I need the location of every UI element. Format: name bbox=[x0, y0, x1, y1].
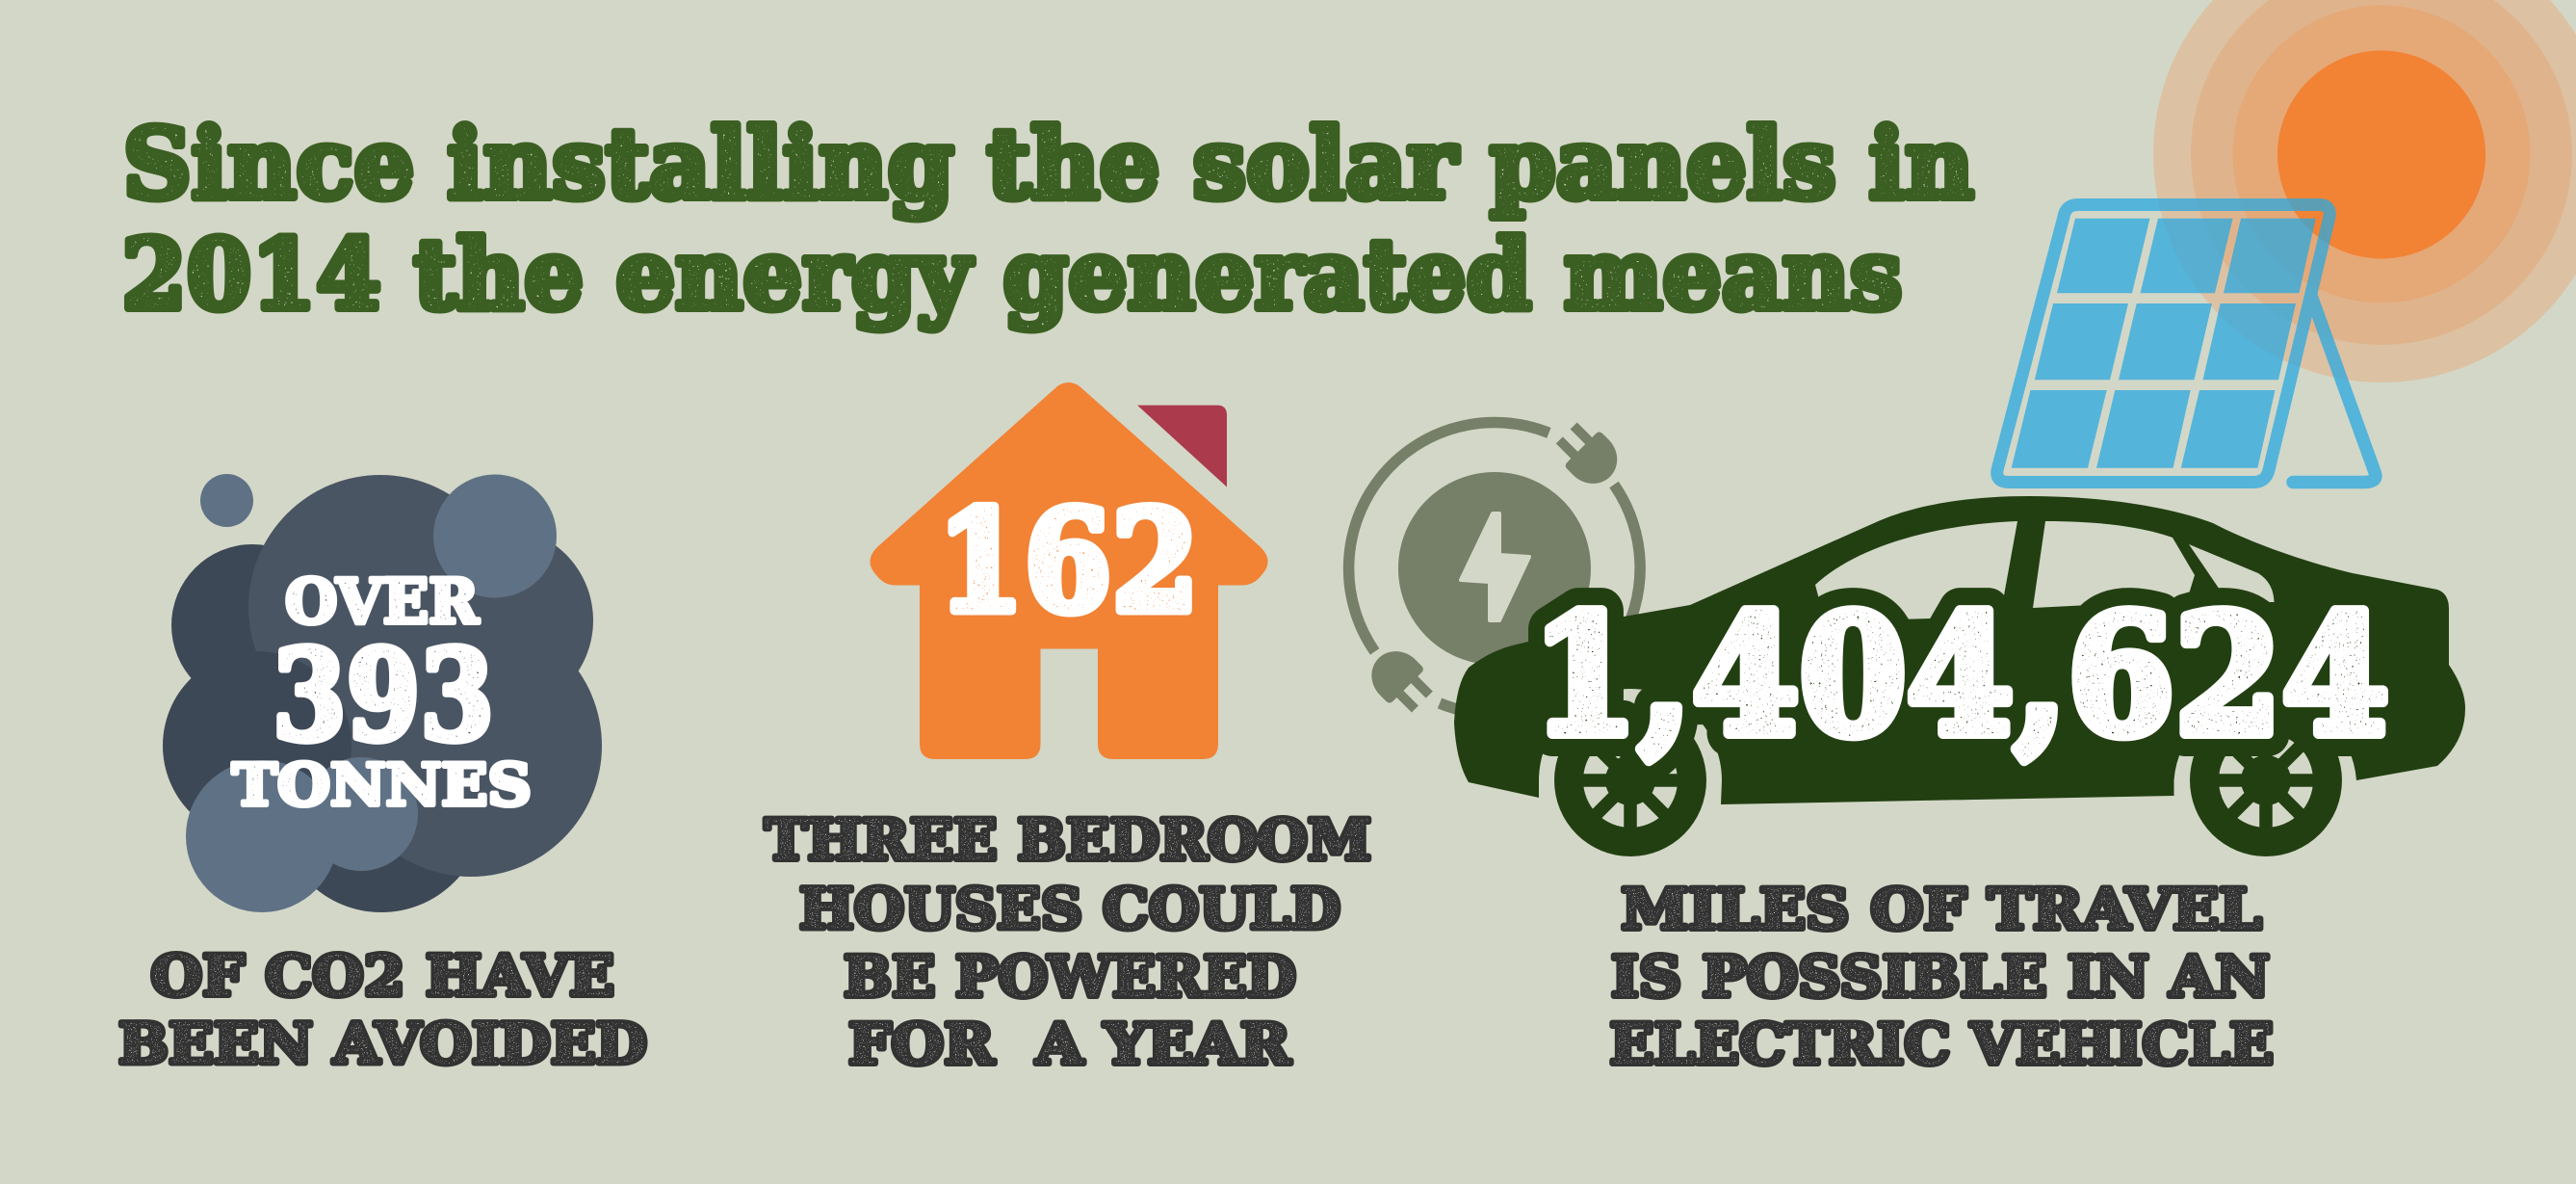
caption: houses powered: HOUSES COULD bbox=[799, 877, 1340, 942]
icon: car bbox=[1454, 496, 2465, 856]
title: Since installing the solar panels in bbox=[123, 107, 1974, 221]
icon: electric charging plug bbox=[1349, 415, 1640, 720]
icon: chimney bbox=[1137, 406, 1227, 487]
icon: solar panel bbox=[1997, 204, 2376, 482]
statistic: over 393 tonnes bbox=[232, 566, 532, 819]
statistic: 1,404,624 miles: 1,404,624 bbox=[1531, 579, 2389, 773]
statistic: over 393 tonnes: 393 bbox=[273, 623, 494, 769]
caption: miles of travel: MILES OF TRAVEL bbox=[1622, 877, 2261, 942]
caption: CO2 avoided: OF CO2 HAVE bbox=[150, 943, 614, 1009]
caption: houses powered: FOR A YEAR bbox=[848, 1012, 1291, 1077]
caption: miles of travel: ELECTRIC VEHICLE bbox=[1610, 1012, 2274, 1077]
icon: front wheel bbox=[1554, 704, 1706, 856]
icon: house bbox=[870, 382, 1268, 759]
caption: CO2 avoided bbox=[118, 943, 647, 1077]
statistic: 162: 162 bbox=[937, 480, 1199, 644]
caption: CO2 avoided: BEEN AVOIDED bbox=[118, 1012, 647, 1077]
caption: miles of travel: IS POSSIBLE IN AN bbox=[1611, 944, 2270, 1010]
statistic: over 393 tonnes: OVER bbox=[285, 566, 480, 638]
caption: miles of travel bbox=[1610, 877, 2274, 1077]
panel: houses bbox=[765, 382, 1371, 1077]
caption: houses powered: THREE BEDROOM bbox=[765, 807, 1371, 873]
icon: sun bbox=[2153, 0, 2576, 382]
statistic: 1,404,624 miles: 1,404,624 bbox=[1531, 579, 2389, 773]
panel: CO2 cloud bbox=[118, 474, 647, 1077]
icon: rear wheel bbox=[2190, 704, 2342, 856]
icon: smoke cloud bbox=[163, 474, 602, 912]
title bbox=[121, 107, 1974, 331]
panel: electric vehicle bbox=[1454, 496, 2465, 1077]
title: 2014 the energy generated means bbox=[121, 218, 1902, 331]
caption: houses powered: BE POWERED bbox=[844, 944, 1296, 1010]
statistic: over 393 tonnes: TONNES bbox=[232, 751, 532, 819]
caption: houses powered bbox=[765, 807, 1371, 1077]
